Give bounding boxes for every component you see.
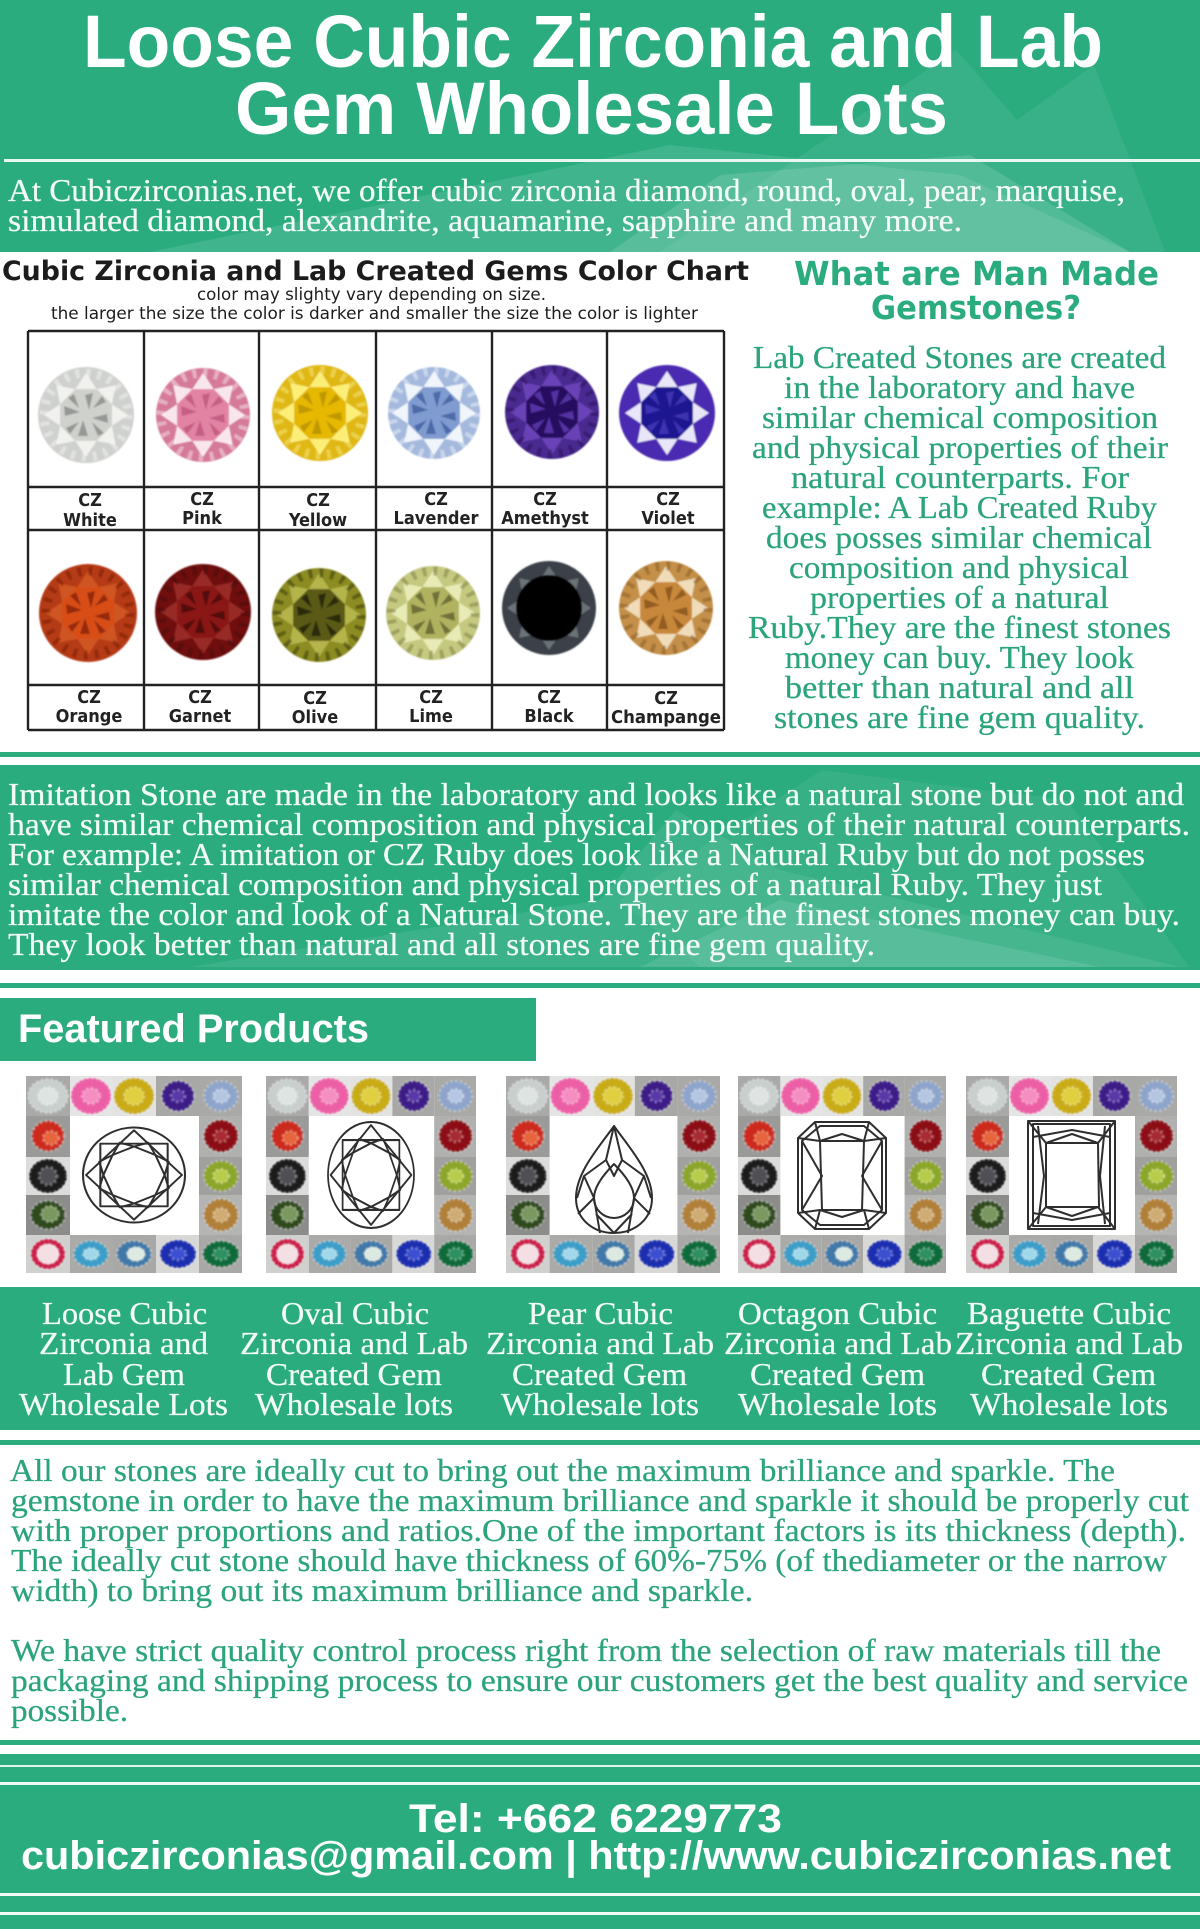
caption: oval (240, 1296, 468, 1422)
gem labels: Orange (56, 706, 122, 727)
gem: pink (156, 368, 250, 462)
color chart (2, 256, 749, 730)
caption: pear (486, 1296, 714, 1422)
product image: pear (506, 1076, 720, 1273)
lab created stones text: money can buy. They look (785, 640, 1134, 675)
product image: octagon (738, 1076, 946, 1273)
caption: oval: Zirconia and Lab (240, 1326, 468, 1361)
gem labels: Yellow (288, 510, 347, 531)
imitation text: similar chemical composition and physical properties of a natural Ruby. They just (8, 867, 1102, 902)
title: Loose Cubic Zirconia and Lab (83, 0, 1103, 83)
caption: oval: Oval Cubic (281, 1296, 429, 1331)
intro text: At Cubiczirconias.net, we offer cubic zirconia diamond, round, oval, pear, marquise, (8, 173, 1125, 208)
gem: champagne (619, 561, 713, 655)
chart grid (28, 331, 724, 730)
product image: oval (266, 1076, 476, 1273)
lab created stones text: Lab Created Stones are created (753, 340, 1166, 375)
lab created stones text: similar chemical composition (762, 400, 1158, 435)
featured products heading: Featured Products (18, 1007, 369, 1051)
gem: lavender (388, 367, 480, 459)
caption: pear: Created Gem (512, 1357, 688, 1392)
caption: loose: Wholesale Lots (19, 1387, 228, 1422)
caption: octagon: Wholesale lots (738, 1387, 937, 1422)
quality text: width) to bring out its maximum brilliance and sparkle. (11, 1573, 753, 1608)
lab created stones text: and physical properties of their (752, 430, 1169, 465)
caption: loose: Zirconia and (39, 1326, 208, 1361)
gem labels: CZ (424, 489, 448, 510)
caption: baguette: Zirconia and Lab (955, 1326, 1183, 1361)
imitation text: They look better than natural and all stones are fine gem quality. (8, 927, 875, 962)
gem labels: Champange (611, 707, 721, 728)
quality text: packaging and shipping process to ensure our customers get the best quality and service (11, 1663, 1188, 1698)
gem: white (38, 367, 134, 463)
gem labels: CZ (306, 490, 330, 511)
panel: imitation stones (0, 765, 1200, 970)
panel: product captions (0, 1287, 1200, 1430)
gem labels: Amethyst (501, 508, 589, 529)
product image: round (26, 1076, 242, 1273)
gem: violet (619, 365, 715, 461)
lab created stones text: natural counterparts. For (791, 460, 1130, 495)
caption: loose: Loose Cubic (42, 1296, 207, 1331)
gem labels: CZ (533, 489, 557, 510)
gem labels: Lime (409, 706, 453, 727)
gem labels: CZ (77, 687, 101, 708)
heading: what are man made gemstones: Gemstones? (871, 288, 1081, 327)
gem: black (502, 561, 596, 655)
imitation text (8, 777, 1190, 962)
gem labels: Black (524, 706, 575, 727)
header panel (0, 0, 1200, 252)
gem labels: Garnet (169, 706, 231, 727)
title (83, 0, 1103, 150)
lab created stones text: does posses similar chemical (766, 520, 1152, 555)
intro text: simulated diamond, alexandrite, aquamarine, sapphire and many more. (8, 203, 962, 238)
caption: oval: Created Gem (266, 1357, 443, 1392)
contact details: Tel: +662 6229773 (409, 1797, 782, 1841)
imitation text: Imitation Stone are made in the laboratory and looks like a natural stone but do not and (8, 777, 1184, 812)
lab created stones text: example: A Lab Created Ruby (762, 490, 1157, 525)
heading: what are man made gemstones: What are Man Made (794, 254, 1159, 293)
chart subtitle: the larger the size the color is darker and smaller the size the color is lighter (51, 304, 698, 324)
gem: olive (272, 568, 366, 662)
caption: baguette: Created Gem (981, 1357, 1157, 1392)
gem labels: CZ (654, 688, 678, 709)
contact details (21, 1797, 1171, 1878)
caption: pear: Pear Cubic (528, 1296, 673, 1331)
caption: pear: Zirconia and Lab (486, 1326, 714, 1361)
gem labels: Pink (182, 508, 223, 529)
gem labels: Olive (292, 707, 338, 728)
lab created stones text: Ruby.They are the finest stones (748, 610, 1171, 645)
lab created stones text (748, 340, 1171, 735)
gem labels: CZ (78, 490, 102, 511)
chart title: Cubic Zirconia and Lab Created Gems Color Chart (2, 256, 749, 287)
quality text (10, 1453, 1189, 1728)
lab created stones text: composition and physical (789, 550, 1129, 585)
quality text: All our stones are ideally cut to bring out the maximum brilliance and sparkle. The (10, 1453, 1115, 1488)
gem labels: Violet (641, 508, 695, 529)
gem: yellow (272, 365, 368, 461)
caption: loose (19, 1296, 228, 1422)
gem labels: CZ (188, 687, 212, 708)
caption: octagon: Octagon Cubic (738, 1296, 937, 1331)
intro text (8, 173, 1125, 238)
heading: what are man made gemstones (794, 254, 1159, 327)
quality text: possible. (11, 1693, 128, 1728)
caption: pear: Wholesale lots (501, 1387, 699, 1422)
lab created stones text: in the laboratory and have (784, 370, 1135, 405)
gem: lime (386, 566, 480, 660)
caption: oval: Wholesale lots (255, 1387, 453, 1422)
gem labels: CZ (419, 687, 443, 708)
caption: baguette: Wholesale lots (970, 1387, 1168, 1422)
contact details: cubiczirconias@gmail.com | http://www.cubiczirconias.net (21, 1834, 1171, 1878)
chart subtitle: color may slighty vary depending on size. (197, 285, 546, 305)
lab created stones text: properties of a natural (810, 580, 1109, 615)
caption: octagon: Created Gem (750, 1357, 926, 1392)
caption: loose: Lab Gem (63, 1357, 185, 1392)
gem labels (56, 489, 721, 728)
imitation text: For example: A imitation or CZ Ruby does look like a Natural Ruby but do not posses (8, 837, 1145, 872)
gem labels: Lavender (394, 508, 478, 529)
imitation text: have similar chemical composition and physical properties of their natural counterparts. (8, 807, 1190, 842)
caption: baguette: Baguette Cubic (967, 1296, 1171, 1331)
quality text: gemstone in order to have the maximum brilliance and sparkle it should be properly cut (11, 1483, 1189, 1518)
lab created stones text: better than natural and all (785, 670, 1134, 705)
gem: orange (39, 564, 137, 662)
footer panel (0, 1740, 1200, 1929)
quality text: The ideally cut stone should have thickness of 60%-75% (of thediameter or the narrow (11, 1543, 1167, 1578)
gem labels: CZ (656, 489, 680, 510)
quality text: We have strict quality control process right from the selection of raw materials till the (11, 1633, 1161, 1668)
gem labels: White (63, 510, 117, 531)
product image: baguette (966, 1076, 1177, 1273)
gem labels: CZ (190, 489, 214, 510)
featured products heading (0, 998, 536, 1061)
title: Gem Wholesale Lots (235, 67, 948, 150)
quality text: with proper proportions and ratios.One of the important factors is its thickness (depth). (11, 1513, 1186, 1548)
lab created stones text: stones are fine gem quality. (774, 700, 1145, 735)
caption: octagon: Zirconia and Lab (724, 1326, 952, 1361)
gem labels: CZ (537, 687, 561, 708)
gem: garnet (155, 564, 251, 660)
imitation text: imitate the color and look of a Natural Stone. They are the finest stones money can buy. (8, 897, 1180, 932)
gem labels: CZ (303, 688, 327, 709)
gem: amethyst (505, 365, 599, 459)
chart subtitle (51, 285, 698, 324)
caption: baguette (955, 1296, 1183, 1422)
caption: octagon (724, 1296, 952, 1422)
